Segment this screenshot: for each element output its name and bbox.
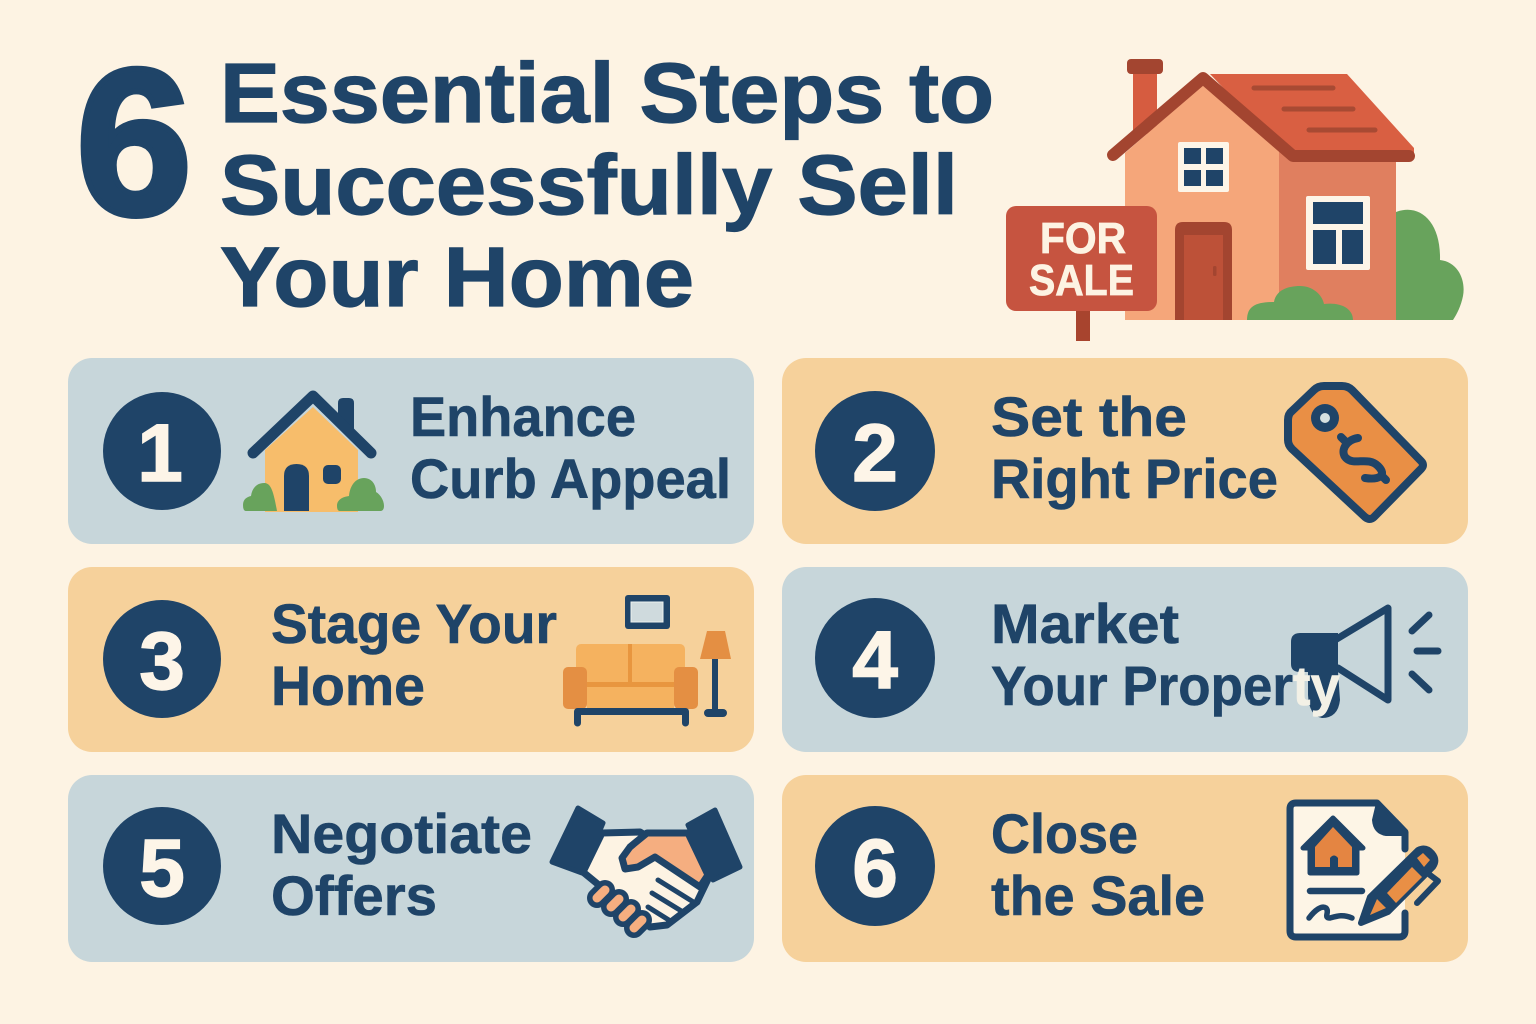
title text: Successfully Sell (220, 138, 958, 232)
panel: step 6 close the sale (782, 775, 1468, 962)
for sale sign: FOR (1040, 214, 1126, 263)
number badge 5 (103, 807, 221, 925)
step text (991, 592, 1340, 717)
icon: house (243, 396, 384, 512)
step text: Right Price (991, 447, 1278, 510)
for sale sign: SALE (1029, 256, 1134, 305)
number badge 5: 5 (139, 823, 185, 914)
number badge 6 (815, 806, 935, 926)
number badge 4 (815, 598, 935, 718)
step text: Offers (271, 864, 437, 927)
step text: Set the (991, 385, 1187, 448)
step text (410, 385, 731, 510)
number badge 1 (103, 392, 221, 510)
title text: Essential Steps to (220, 46, 994, 140)
step text: Curb Appeal (410, 447, 731, 510)
icon: price tag (1288, 386, 1423, 519)
step text: Home (271, 654, 425, 717)
step text (991, 385, 1278, 510)
number badge 4: 4 (852, 615, 898, 706)
title text (220, 46, 994, 324)
icon: signed contract and pen (1290, 803, 1438, 937)
number badge 2: 2 (852, 408, 898, 499)
step text: Close (991, 802, 1138, 865)
step text (991, 802, 1205, 927)
panel: step 5 negotiate offers (68, 775, 754, 962)
panel: step 3 stage your home (68, 567, 754, 752)
number badge 1: 1 (137, 408, 183, 499)
title text: Your Home (220, 230, 694, 324)
number badge 6: 6 (852, 823, 898, 914)
for sale sign (1006, 206, 1157, 341)
number badge 3: 3 (139, 616, 185, 707)
number badge 3 (103, 600, 221, 718)
step text (271, 802, 532, 927)
icon: megaphone (1291, 608, 1438, 718)
number badge 2 (815, 391, 935, 511)
big numeral 6: 6 (76, 27, 192, 259)
illustration: house with for sale sign (1006, 59, 1464, 341)
step text: Market (991, 592, 1179, 655)
icon: sofa, picture and lamp (563, 595, 731, 723)
step text: Negotiate (271, 802, 532, 865)
step text: Enhance (410, 385, 636, 448)
panel: step 1 enhance curb appeal (68, 358, 754, 544)
panel: step 2 set the right price (782, 358, 1468, 544)
step text (271, 592, 557, 717)
title (76, 27, 994, 324)
icon: handshake (552, 808, 740, 928)
step text: Stage Your (271, 592, 557, 655)
step text: the Sale (991, 864, 1205, 927)
step text: Your Property (991, 654, 1340, 717)
panel: step 4 market your property (782, 567, 1468, 752)
